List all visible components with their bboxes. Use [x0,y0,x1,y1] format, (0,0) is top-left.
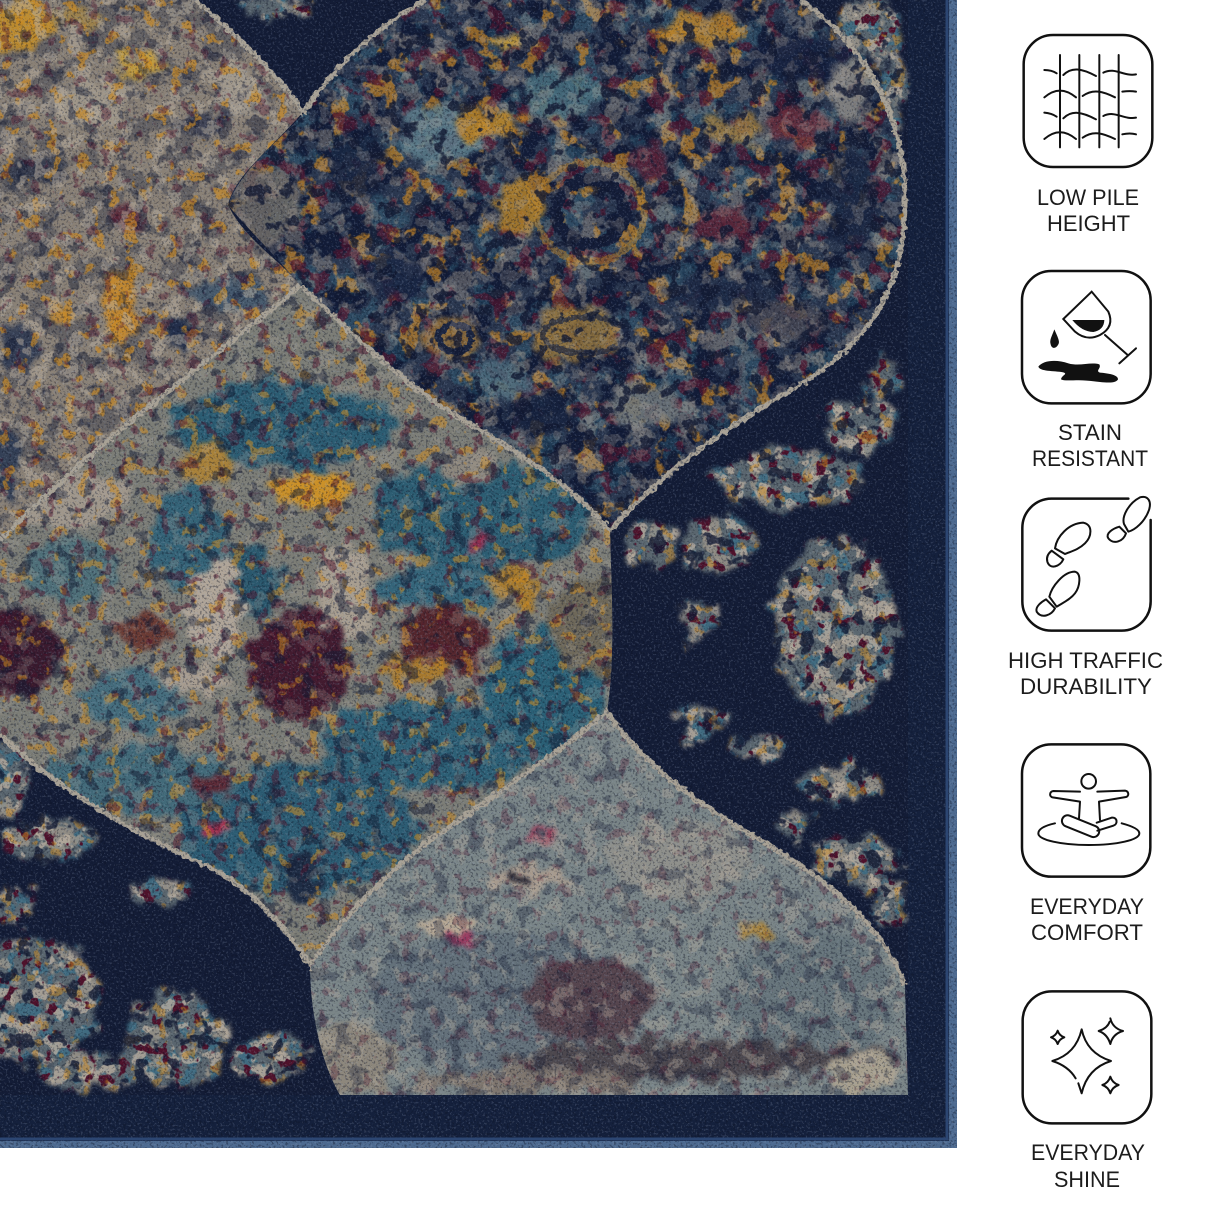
icon: high traffic durability [1022,497,1151,631]
wine [1072,320,1104,332]
label: high traffic durability: HIGH TRAFFIC [1008,648,1163,673]
cream lattice lines [0,0,905,985]
label: stain resistant: RESISTANT [1032,446,1148,471]
label: stain resistant: STAIN [1058,420,1122,445]
sparkle lower right [1102,1077,1119,1093]
label: everyday comfort: EVERYDAY [1030,894,1144,919]
label: low pile height: LOW PILE [1037,185,1139,210]
label: high traffic durability [1008,648,1163,699]
label: stain resistant [1032,420,1148,471]
footprint top right [1124,497,1150,532]
head [1081,774,1096,789]
large sparkle [1052,1029,1111,1093]
pile fibres [1044,55,1136,147]
label: high traffic durability: DURABILITY [1020,674,1152,699]
panel: dark medallion upper right [220,0,920,540]
field base [0,0,908,1095]
label: low pile height [1037,185,1139,236]
label: everyday comfort: COMFORT [1031,920,1143,945]
wine glass [1063,292,1110,338]
label: low pile height: HEIGHT [1047,211,1130,236]
navy border [0,0,949,1141]
icon frame [1022,271,1151,403]
label: everyday comfort [1030,894,1144,945]
label: everyday shine: EVERYDAY [1031,1140,1145,1165]
rug outer edge [0,0,957,1148]
label: everyday shine [1031,1140,1145,1192]
panel: taupe upper left [0,0,320,550]
footprint lower [1049,572,1079,607]
panel: teal centre [0,280,650,980]
icon: low pile height [1024,35,1152,167]
torso and arms [1050,791,1128,820]
sparkle upper right [1099,1018,1123,1044]
icon frame [1023,991,1151,1123]
puddle [1038,361,1118,383]
mat [1038,823,1139,845]
rug binding edge [0,0,947,1139]
label: everyday shine: SHINE [1054,1167,1120,1192]
icon frame [1024,35,1152,167]
icon: everyday comfort [1022,744,1150,877]
panel: grey lower right [300,710,920,1110]
icon: stain resistant [1022,271,1151,403]
icon frame with gap [1022,499,1151,631]
icon frame [1022,744,1150,877]
florals in navy field [0,0,908,1095]
pile grain [0,0,949,1141]
rug photograph [0,0,957,1148]
icon: everyday shine [1023,991,1151,1123]
crossed legs [1060,814,1101,839]
drop [1050,329,1059,348]
sparkle left [1051,1031,1064,1044]
medallion ring [439,162,644,353]
footprint middle [1055,523,1090,554]
